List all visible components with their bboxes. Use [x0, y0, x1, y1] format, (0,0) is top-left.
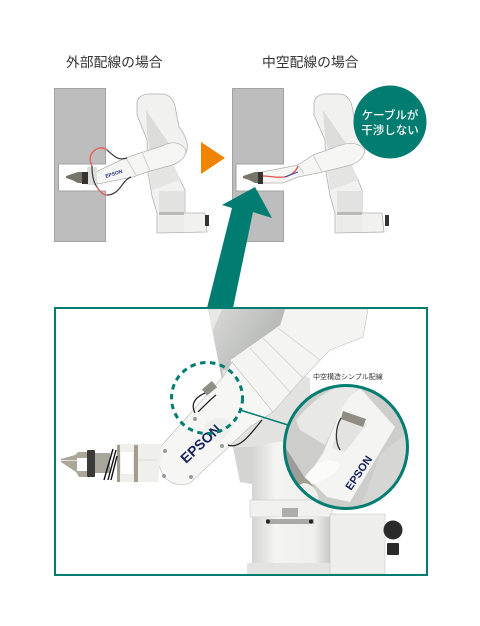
panel: detail view	[55, 308, 427, 575]
logo: EPSON	[105, 169, 124, 180]
dashed circle: cable highlight	[172, 362, 242, 434]
title: external wiring: 外部配線の場合	[66, 55, 163, 70]
magnified circle	[283, 384, 410, 511]
robot: hollow wiring	[243, 94, 389, 233]
external cables	[107, 150, 127, 159]
callout: cables do not interfere: 干渉しない	[361, 123, 419, 137]
logo: EPSON	[177, 421, 224, 466]
robot: external wiring	[66, 94, 209, 233]
connector line	[240, 410, 288, 425]
label: hollow structure simple wiring: 中空構造シンプル配線	[313, 372, 383, 381]
panel: hollow wiring wall	[232, 88, 284, 242]
gripper	[61, 452, 87, 477]
cable at elbow	[193, 392, 262, 446]
magnified circle: EPSON	[344, 454, 375, 493]
panel: external wiring wall	[54, 88, 106, 242]
frame	[55, 308, 427, 575]
wrist	[117, 444, 162, 482]
callout: cables do not interfere: ケーブルが	[362, 108, 419, 122]
arrow: orange triangle	[201, 142, 225, 174]
base	[252, 442, 311, 500]
callout: cables do not interfere	[354, 86, 426, 158]
title: hollow wiring: 中空配線の場合	[262, 55, 359, 70]
large robot	[61, 309, 402, 575]
arrow: teal up arrow	[207, 187, 272, 308]
internal cables	[263, 166, 298, 177]
